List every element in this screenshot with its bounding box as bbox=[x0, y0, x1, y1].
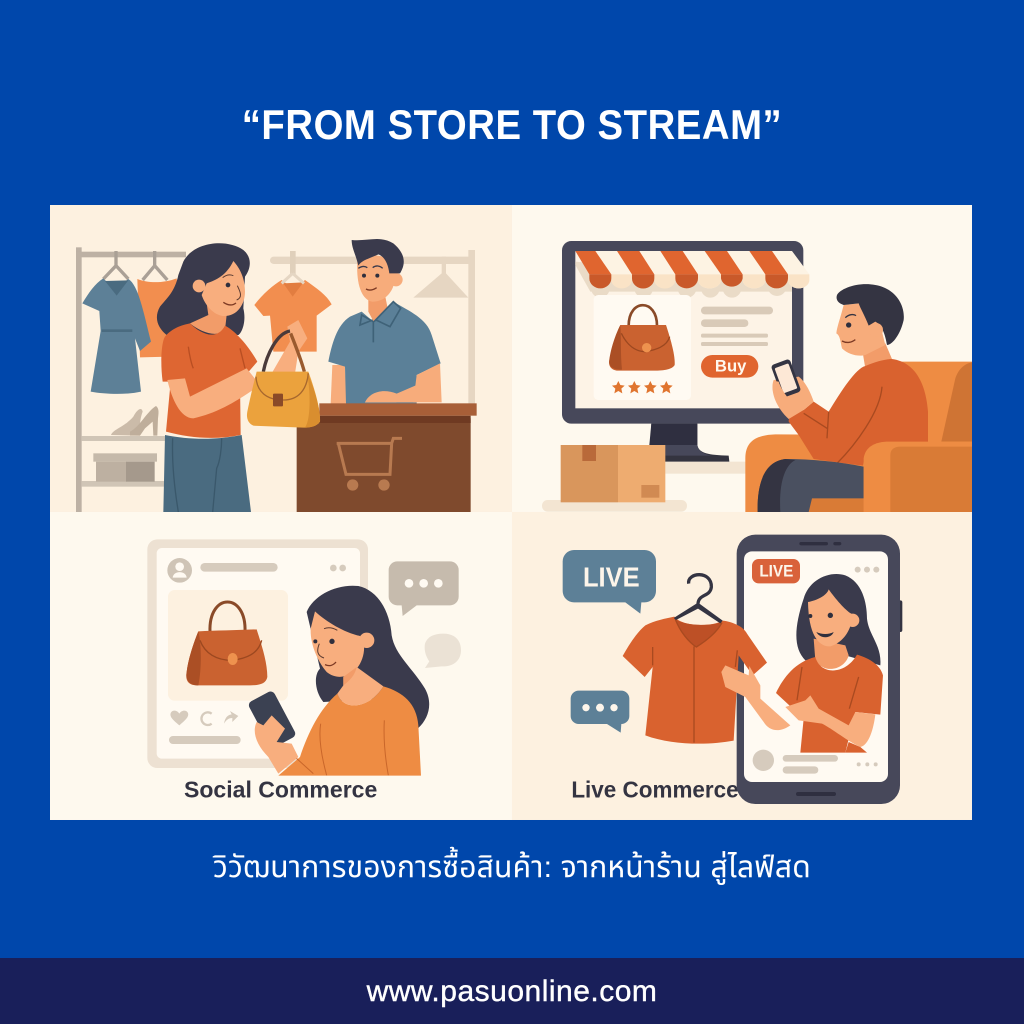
armchair front arm bbox=[864, 442, 972, 512]
hangers bbox=[103, 251, 167, 280]
shoes bbox=[111, 406, 159, 436]
phone bbox=[737, 535, 902, 804]
social post frame bbox=[147, 539, 368, 768]
post placeholders bbox=[169, 563, 346, 744]
live speech bubble bbox=[563, 550, 656, 614]
salesman bbox=[328, 239, 442, 404]
clothes rack right bbox=[270, 250, 475, 404]
live badge bbox=[752, 559, 800, 583]
parcel box bbox=[542, 445, 687, 512]
panel: social commerce bbox=[50, 512, 512, 820]
buy button: Buy bbox=[715, 357, 747, 376]
cart icon bbox=[337, 438, 402, 474]
blue dress bbox=[82, 278, 151, 394]
title: “FROM STORE TO STREAM” bbox=[242, 101, 782, 148]
awning shadow bbox=[575, 262, 792, 292]
product card bbox=[594, 295, 691, 400]
star rating bbox=[612, 381, 673, 393]
clothes rack left bbox=[76, 247, 186, 512]
orange tee behind bbox=[137, 278, 180, 357]
live commerce label: Live Commerce bbox=[571, 777, 739, 803]
social commerce label: Social Commerce bbox=[184, 777, 377, 803]
awning bbox=[575, 251, 809, 288]
illustration grid bbox=[50, 205, 972, 820]
counter bbox=[297, 403, 477, 512]
panel: live commerce bbox=[512, 512, 972, 820]
chat bubble bbox=[571, 691, 629, 733]
viewer row bbox=[753, 750, 838, 774]
buy button bbox=[701, 355, 758, 378]
product bag bbox=[609, 305, 675, 371]
monitor stand bbox=[649, 424, 729, 462]
subtitle: วิวัฒนาการของการซื้อสินค้า: จากหน้าร้าน สู่ไลฟ์สด bbox=[213, 851, 811, 884]
man on sofa bbox=[758, 284, 928, 512]
footer bar bbox=[0, 958, 1024, 1024]
live badge: LIVE bbox=[759, 562, 793, 581]
customer woman bbox=[157, 243, 307, 512]
reaction icons bbox=[170, 711, 238, 725]
panel: physical store bbox=[50, 205, 512, 512]
shoe box bbox=[93, 453, 157, 482]
panel: online store bbox=[512, 205, 972, 512]
orange tee on hanger bbox=[254, 273, 332, 352]
armchair bbox=[745, 362, 972, 512]
desk shadow bbox=[665, 462, 747, 474]
text placeholder lines bbox=[701, 307, 773, 346]
speech bubbles bbox=[389, 561, 461, 668]
host woman bbox=[721, 574, 883, 753]
website url: www.pasuonline.com bbox=[367, 975, 657, 1008]
hand with phone bbox=[771, 359, 814, 419]
live speech bubble: LIVE bbox=[583, 561, 640, 592]
product image bbox=[168, 590, 288, 701]
screen dots bbox=[855, 567, 879, 766]
handbag bbox=[186, 602, 267, 685]
shirt on hanger bbox=[623, 575, 767, 744]
yellow handbag bbox=[247, 331, 320, 428]
woman with phone bbox=[247, 586, 429, 776]
monitor bbox=[562, 241, 803, 424]
avatar bbox=[167, 558, 192, 583]
